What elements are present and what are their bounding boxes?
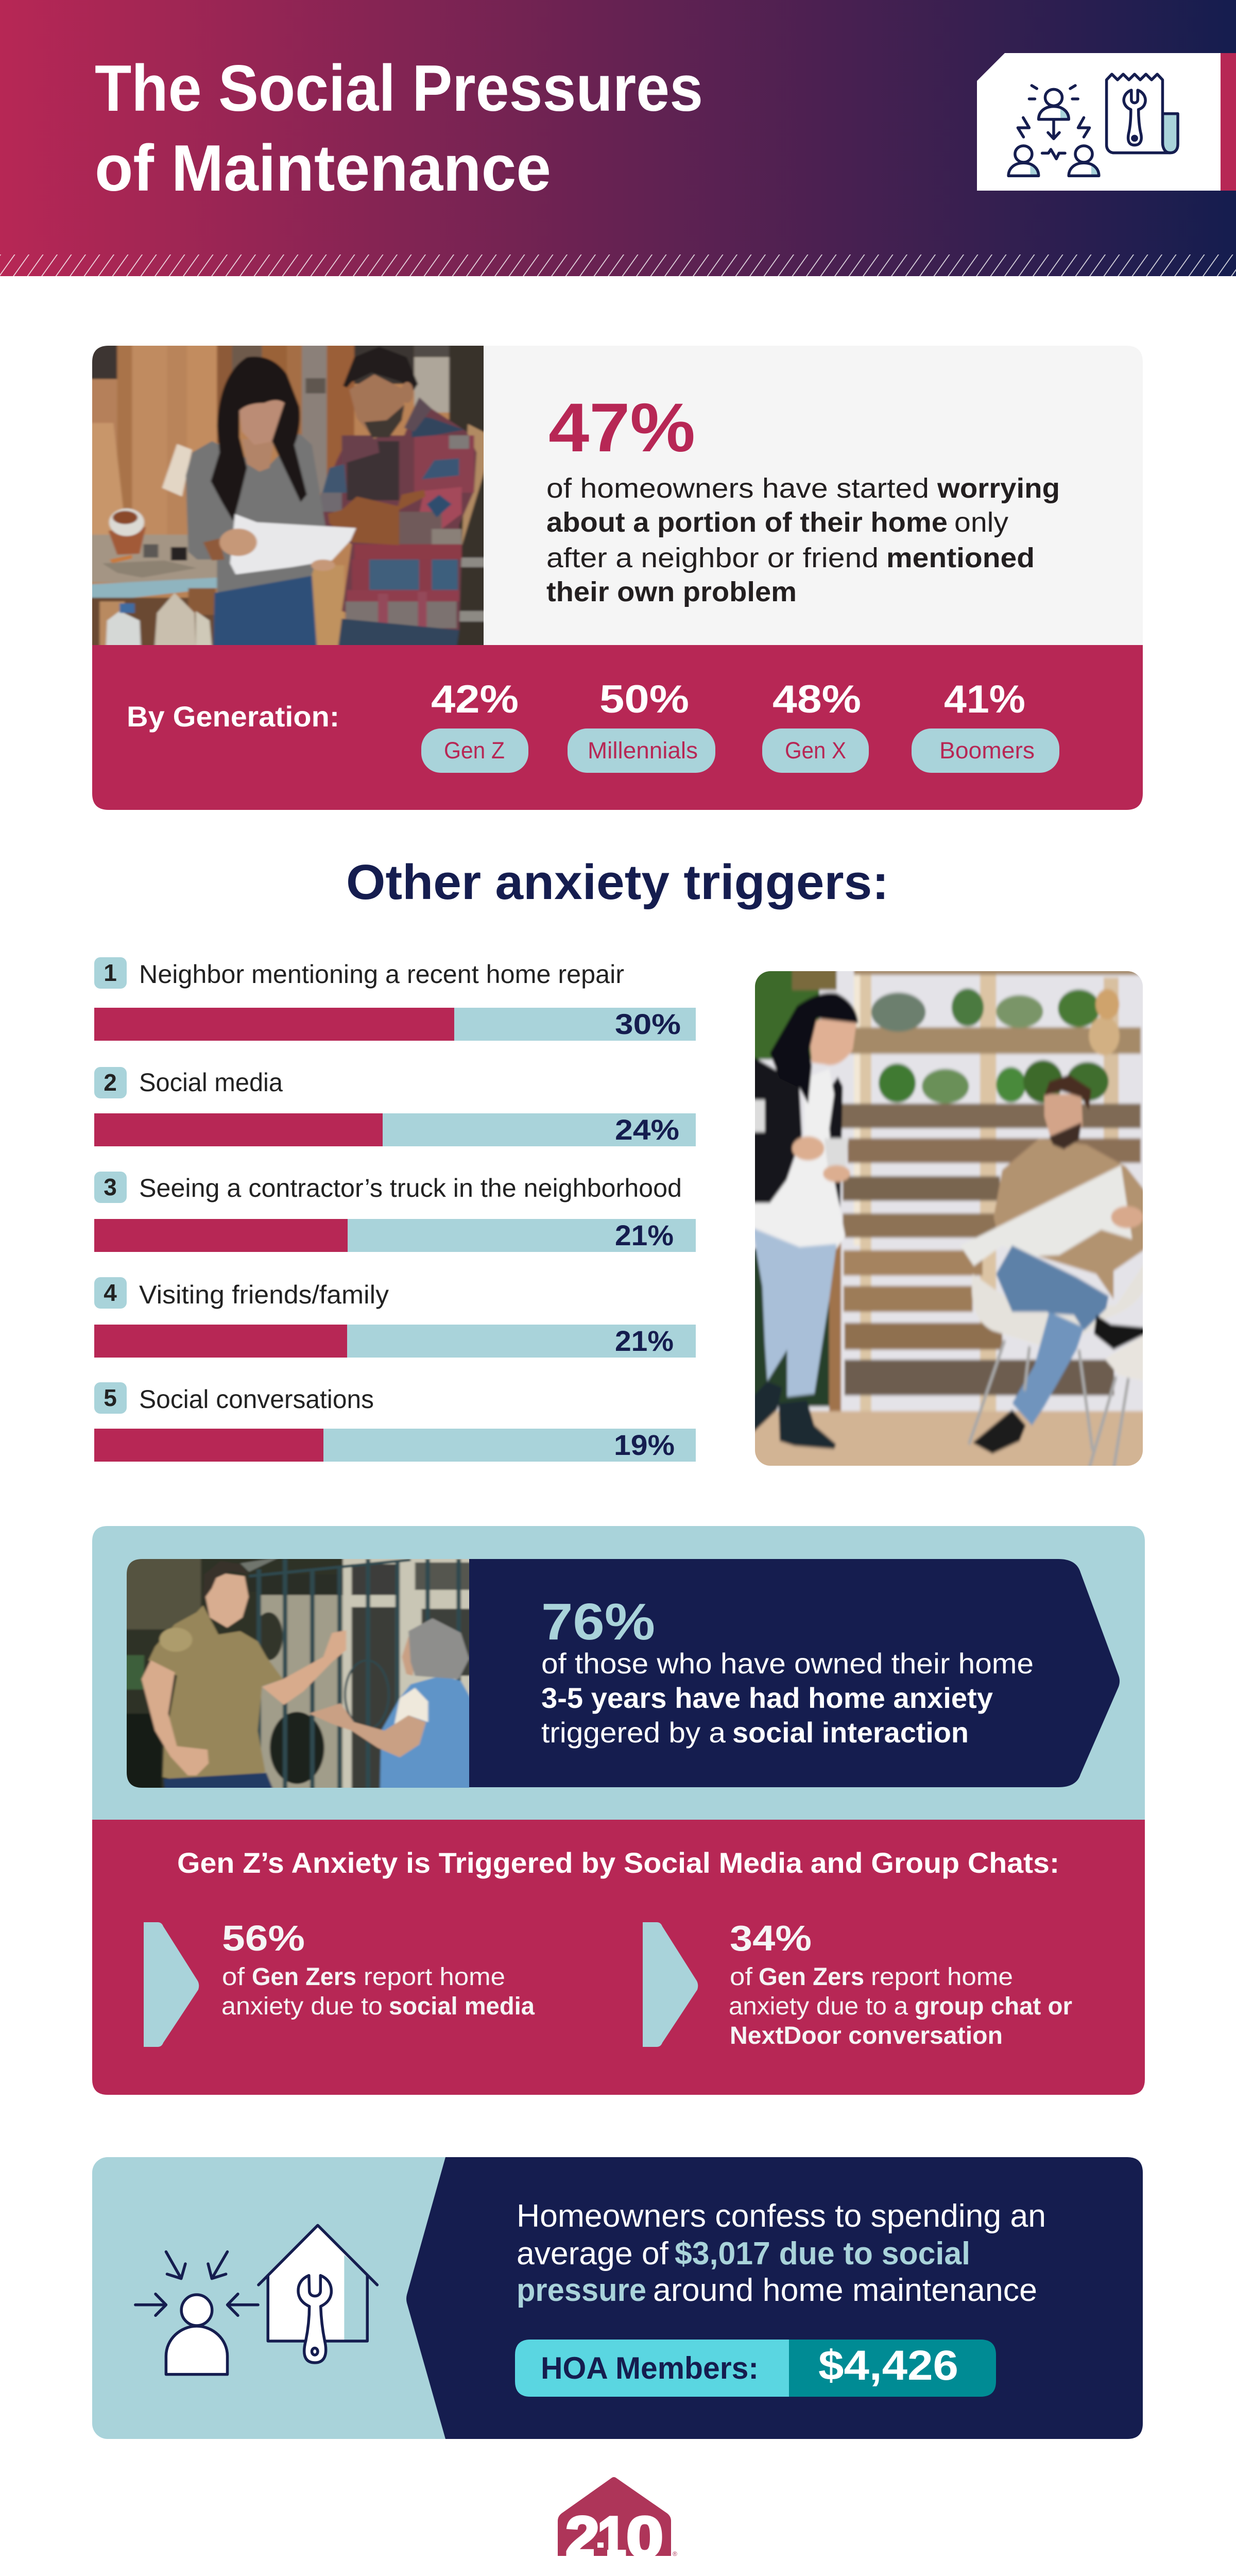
description text: about a portion of their home [546,507,948,538]
panel: 47% of homeowners [90,344,1143,810]
description text: worrying [937,473,1060,504]
stat: 56% social media: Gen Zers [252,1963,356,1991]
trigger 5 [94,1382,696,1462]
trigger 1: 1 [104,959,117,986]
man [319,397,476,634]
stat: 76%: 76% [541,1593,655,1651]
trigger 4: 21% [615,1325,674,1357]
by generation label: By Generation: [127,700,339,733]
icon: people and repair receipt [977,53,1236,191]
stat: 34% group chat [643,1918,1072,2049]
title [95,52,703,205]
photo: woman and man with plans on pallet wall [752,968,1146,1469]
logo: 2-10: 1 [597,2505,626,2569]
photo: couple reviewing plans in workshop [90,344,487,647]
trigger 2: 2 [104,1069,117,1096]
stat: 34% group chat: Gen Zers [759,1963,864,1991]
stat: 34% group chat: report home [871,1963,1013,1991]
header banner [0,0,1236,276]
boomers stat: Boomers [939,737,1035,764]
spending text: pressure [517,2273,646,2308]
Gen Z heading: Gen Z’s Anxiety is Triggered by Social Media and Group Chats: [177,1846,1059,1879]
trigger 5: 5 [104,1384,117,1411]
panel: spending due to social pressure [92,2157,1143,2439]
boomers stat: 41% [944,677,1025,721]
logo: 2-10 [558,2477,677,2556]
gen z stat: Gen Z [444,737,505,764]
callout arrow [469,1559,1120,1787]
man [993,1138,1146,1299]
callout text: 3-5 years have had home anxiety [541,1682,993,1714]
HOA members pill: $4,426 [818,2342,958,2389]
spending text: around home maintenance [653,2273,1037,2308]
trigger 1: Neighbor mentioning a recent home repair [139,960,624,989]
gen z stat: 42% [431,677,519,721]
gen z stat [421,677,528,773]
spending text: $3,017 due to social [675,2236,970,2272]
gen x stat [762,677,869,773]
logo: 2-10: 2 [565,2505,599,2569]
panel: 76% social interaction and Gen Z [92,1526,1145,2095]
trigger 5: Social conversations [139,1385,374,1414]
title: The Social Pressures [95,52,703,125]
HOA members pill: HOA Members: [541,2351,759,2385]
description text: mentioned [886,543,1035,573]
callout text: social interaction [732,1716,969,1749]
trigger 2: Social media [139,1068,283,1097]
trigger 1 [94,957,696,1041]
callout text: triggered by a [541,1716,726,1749]
description text: after a neighbor or friend [546,543,879,573]
trigger 5: 19% [614,1429,675,1461]
stat: 34% group chat: 34% [730,1918,812,1958]
trigger 2 [94,1067,696,1146]
stat: 56% social media: of [222,1963,245,1991]
stat: 34% group chat: group chat or [915,1993,1072,2020]
woman [752,1056,802,1203]
trigger 1: 30% [615,1008,681,1040]
bar chart: anxiety triggers [94,957,696,1462]
millennials stat: 50% [599,677,689,721]
by generation band [92,645,1143,810]
logo: 2-10: 0 [626,2505,663,2569]
millennials stat: Millennials [588,737,698,764]
millennials stat [568,677,715,773]
stat: 34% group chat: NextDoor conversation [730,2022,1003,2049]
spending text: average of [517,2236,669,2272]
stat: 56% social media: social media [389,1993,535,2020]
man [148,1605,283,1783]
callout text: of those who have owned their home [541,1647,1034,1680]
boomers stat [912,677,1059,773]
description text: of homeowners have started [546,473,929,504]
Gen Z band [92,1820,1145,2095]
stat: 56% social media: anxiety due to [221,1993,383,2020]
HOA members pill [515,2340,996,2397]
logo: 2-10: ® [673,2550,677,2557]
trigger 4 [94,1277,696,1358]
trigger 4: 4 [104,1279,117,1306]
description text: their own problem [546,577,797,607]
gen x stat: 48% [772,677,861,721]
trigger 2: 24% [615,1113,679,1146]
trigger 3: 21% [615,1219,674,1251]
woman [380,1676,472,1789]
trigger 3: 3 [104,1174,117,1200]
icon: person pressured by house repair [135,2225,377,2375]
trigger 4: Visiting friends/family [139,1280,389,1309]
gen x stat: Gen X [785,737,846,764]
stat: 56% social media [144,1918,535,2047]
stat: 34% group chat: of [730,1963,753,1991]
spending text: Homeowners confess to spending an [517,2198,1046,2234]
woman [186,433,325,596]
description text: only [954,507,1008,538]
spending text [517,2198,1046,2308]
heading: other anxiety triggers: Other anxiety triggers: [346,855,889,910]
description text [546,473,1060,607]
stat: 47%: 47% [548,389,695,466]
trigger 3: Seeing a contractor’s truck in the neighborhood [139,1174,682,1202]
stat: 56% social media: report home [364,1963,505,1991]
stat: 56% social media: 56% [222,1918,305,1958]
photo: man and woman talking at gate [125,1557,472,1789]
stat: 34% group chat: anxiety due to a [729,1993,908,2020]
title: of Maintenance [95,131,551,205]
callout text [541,1647,1034,1749]
trigger 3 [94,1172,696,1252]
